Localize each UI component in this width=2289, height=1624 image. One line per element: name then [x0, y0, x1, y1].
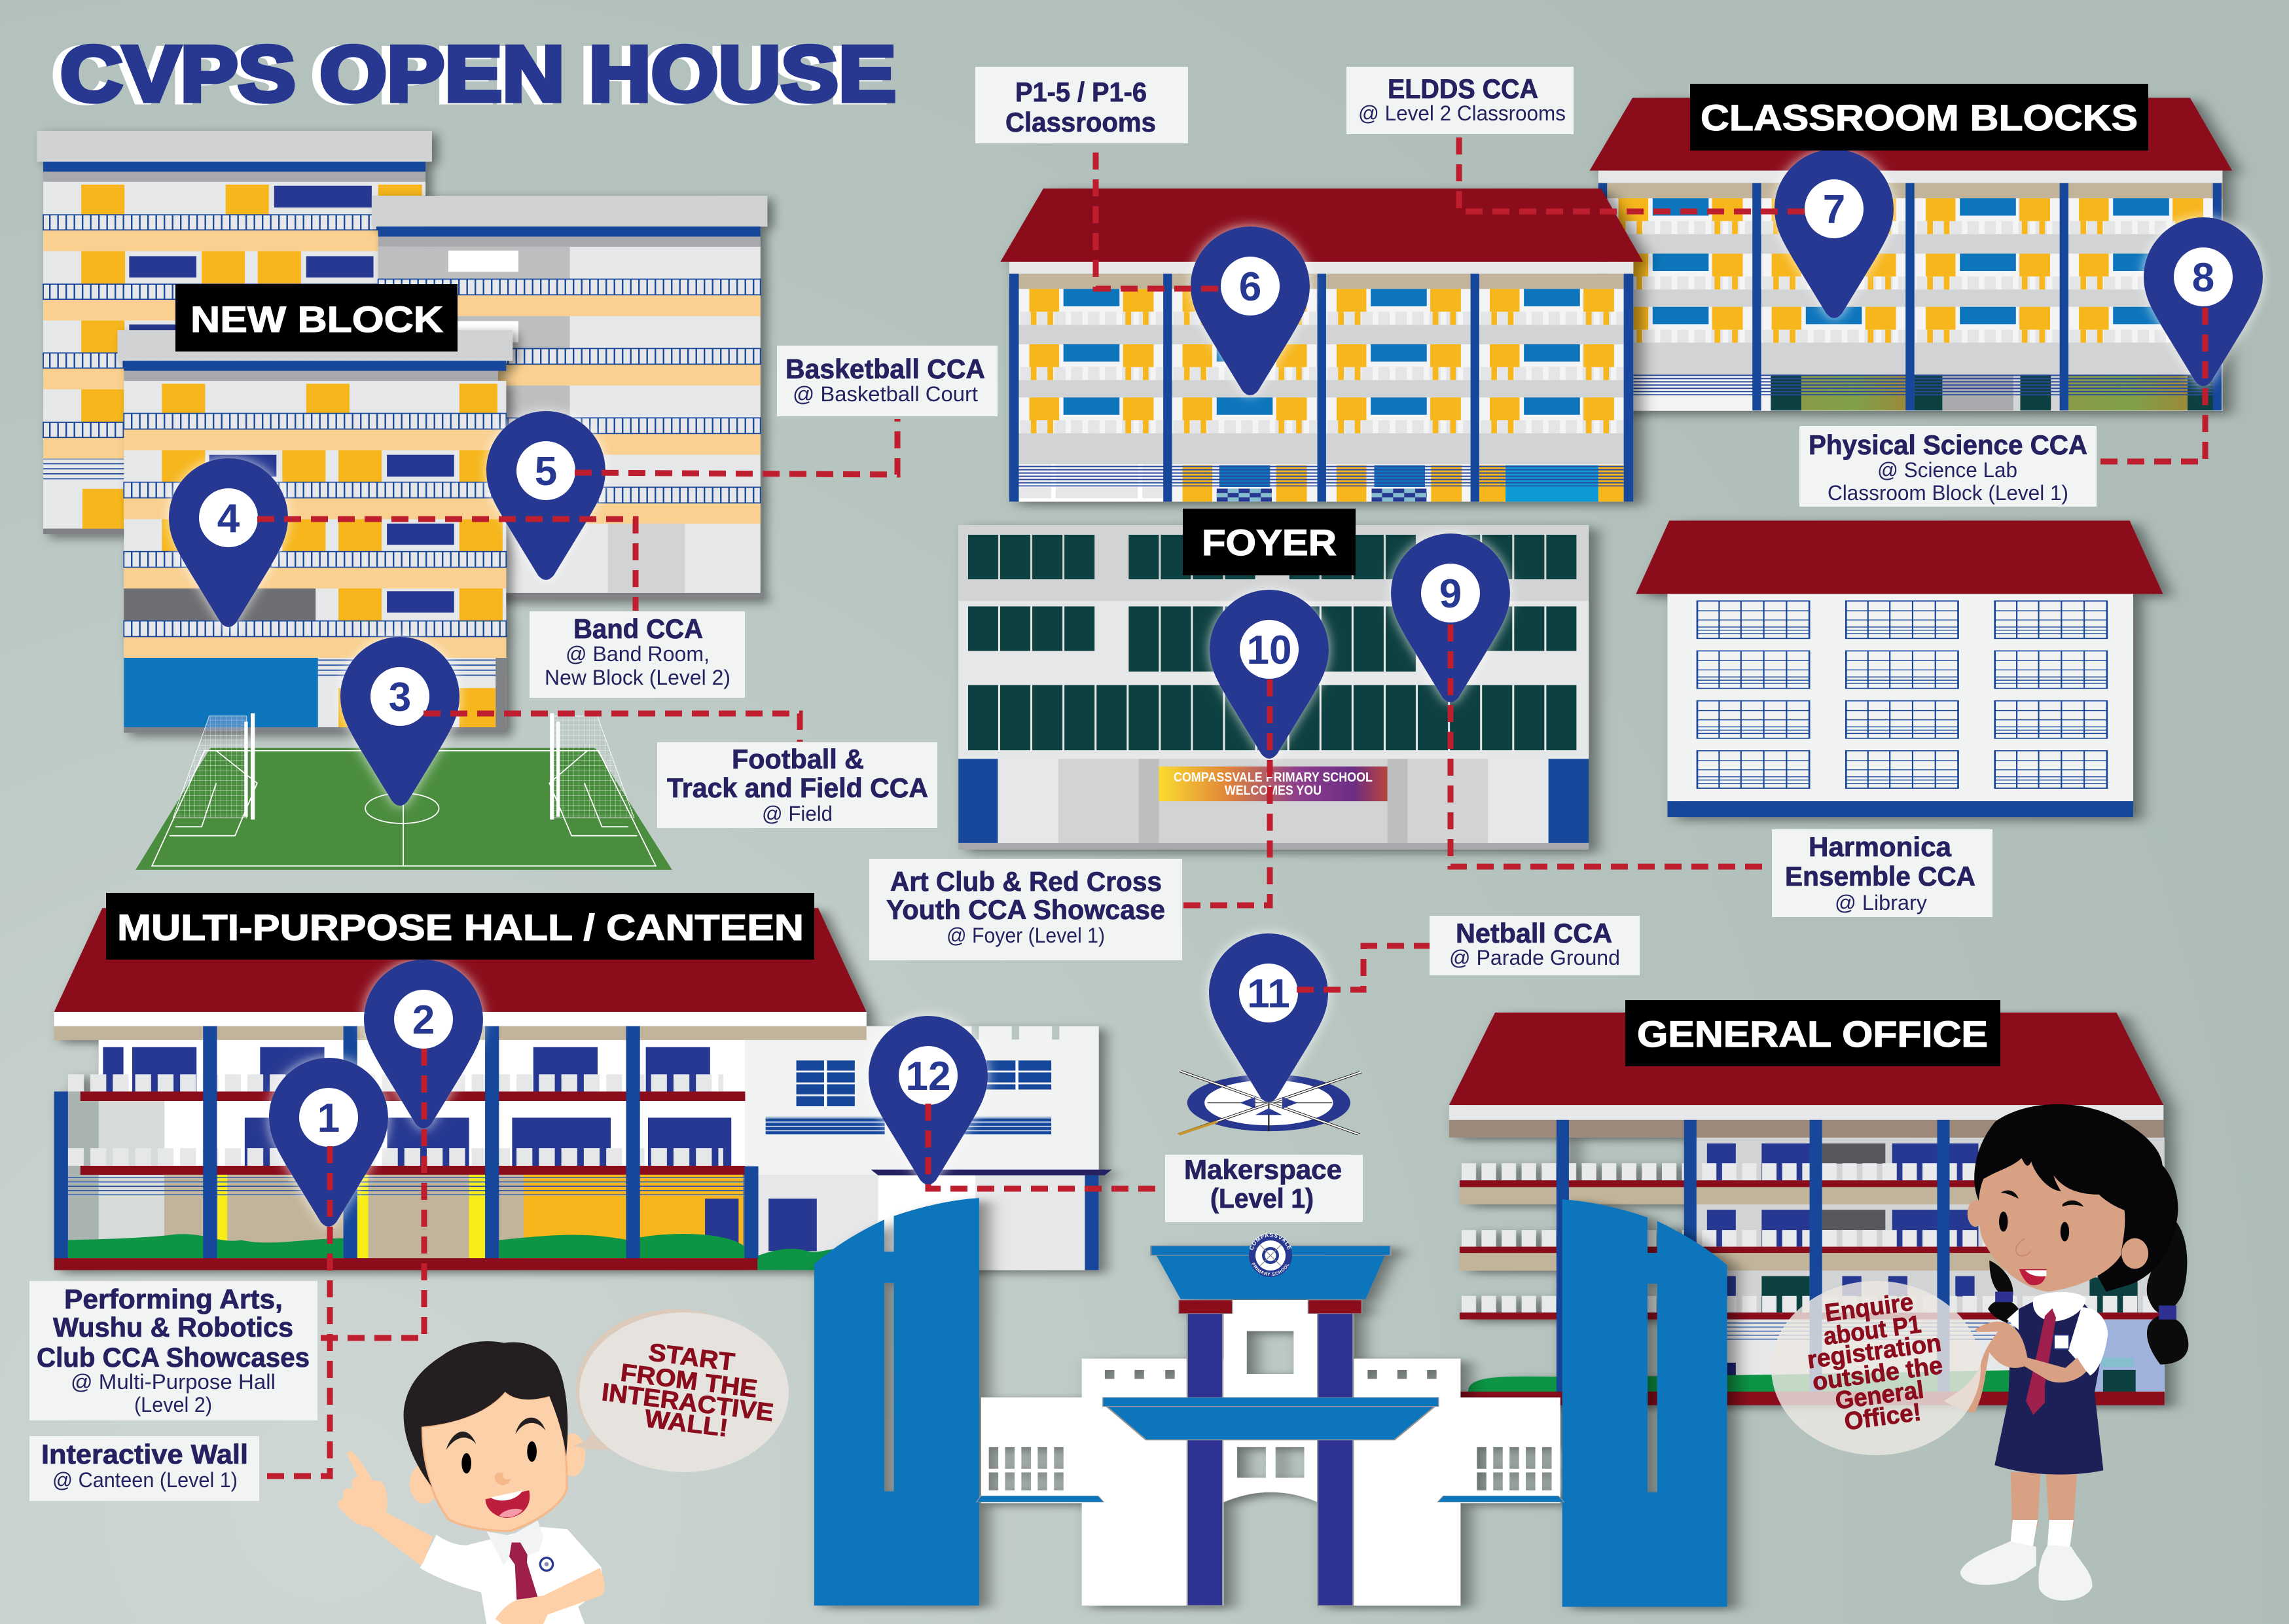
label: ELDDS CCA: ELDDS CCA: [1388, 73, 1538, 104]
new block rear left wing: [37, 131, 432, 534]
label: Basketball CCA: [777, 346, 998, 416]
gate logo: COMPASSVALE: [1250, 1233, 1292, 1250]
connector: pin 10 to Art Club: [1182, 679, 1270, 905]
pin 11: 11: [1247, 971, 1290, 1017]
gate logo: PRIMARY SCHOOL: [1252, 1262, 1289, 1276]
heading: Foyer: FOYER: [1202, 522, 1337, 563]
label: Art Club and Red Cross: Art Club & Red Cross: [890, 866, 1162, 897]
label: ELDDS CCA: [1346, 67, 1574, 134]
girl speech bubble: about P1: [1822, 1310, 1923, 1351]
boy eyes: [461, 1441, 537, 1473]
boy pointing arm: [338, 1451, 433, 1566]
label: Makerspace: Makerspace: [1184, 1154, 1342, 1185]
pin 11: [1209, 933, 1328, 1102]
label: Harmonica Ensemble CCA: [1772, 829, 1992, 917]
label: Netball CCA: Netball CCA: [1456, 918, 1612, 948]
pin 12: [869, 1016, 988, 1185]
classroom block front: [1000, 189, 1643, 501]
connector: pin 1 to Interactive Wall: [260, 1146, 330, 1476]
girl face: [1978, 1158, 2125, 1291]
pin 1: 1: [317, 1096, 340, 1141]
girl ear: [1968, 1200, 2148, 1269]
connector: pin 9 to Harmonica: [1451, 624, 1773, 867]
label: P1-5 / P1-6 Classrooms: [975, 67, 1188, 143]
girl pinafore: [1994, 1299, 2106, 1475]
label: Band CCA: Band CCA: [573, 613, 703, 644]
pin 4: [169, 458, 288, 627]
banner text: COMPASSVALE PRIMARY SCHOOL: [1174, 770, 1373, 785]
title: CVPS OPEN HOUSE: [60, 30, 896, 118]
heading: Classroom Blocks: [1690, 84, 2148, 151]
label: Physical Science CCA: Classroom Block (Level 1): [1828, 481, 2068, 505]
pin 12: 12: [906, 1054, 950, 1099]
boy collar: [486, 1521, 543, 1566]
girl mouth: [2019, 1269, 2046, 1285]
banner text: [1174, 770, 1373, 798]
boy hair: [404, 1341, 568, 1487]
parade ground emblem: [1179, 1071, 1361, 1134]
connector: pin 12 to Makerspace: [928, 1104, 1165, 1189]
heading: General Office: [1625, 1000, 2000, 1066]
label: Harmonica Ensemble CCA: Ensemble CCA: [1785, 861, 1975, 892]
heading: New Block: NEW BLOCK: [190, 298, 443, 340]
boy tie: [509, 1542, 537, 1600]
label: Basketball CCA: @ Basketball Court: [793, 382, 978, 406]
connector: pin 11 to Netball: [1297, 946, 1430, 990]
boy nose: [495, 1473, 511, 1485]
boy ears: [410, 1434, 585, 1504]
gate left tower: [814, 1198, 979, 1606]
boy eyebrows: [446, 1418, 545, 1450]
heading: Multi-Purpose Hall / Canteen: [106, 893, 814, 960]
connector: pin 4 to Band: [257, 519, 636, 611]
school gate main building: [814, 1198, 1727, 1607]
label: Performing Arts: @ Multi-Purpose Hall: [71, 1370, 276, 1394]
girl badge: [2054, 1335, 2069, 1349]
heading: General Office: GENERAL OFFICE: [1637, 1013, 1988, 1055]
general office building: [1449, 1013, 2165, 1405]
label: Basketball CCA: Basketball CCA: [785, 353, 985, 384]
boy shirt: [420, 1527, 604, 1624]
pin 8: [2144, 217, 2263, 386]
label: Interactive Wall: Interactive Wall: [41, 1439, 248, 1470]
boy speech bubble: WALL!: [643, 1405, 730, 1443]
girl hair: [1974, 1104, 2178, 1291]
football field: [135, 713, 672, 870]
label: Football and Track and Field CCA: [657, 742, 937, 828]
connector: pin 3 to Football: [424, 713, 800, 742]
pin 9: 9: [1439, 571, 1462, 617]
connector: pin 7 to ELDDS: [1459, 134, 1805, 211]
label: Netball CCA: @ Parade Ground: [1449, 946, 1620, 969]
foyer welcome banner: [1159, 767, 1388, 801]
pin 5: 5: [535, 449, 557, 494]
girl speech bubble: [1771, 1281, 1981, 1455]
label: Physical Science CCA: Physical Science CCA: [1809, 429, 2087, 460]
connector: pin 8 to Physical Science: [2098, 308, 2205, 461]
title: CVPS OPEN HOUSE: [52, 31, 888, 119]
label: Performing Arts: Performing Arts,: [64, 1284, 283, 1314]
label: Performing Arts: [29, 1281, 317, 1420]
label: Art Club and Red Cross: @ Foyer (Level 1): [946, 924, 1105, 947]
girl collar: [2033, 1292, 2086, 1322]
label: ELDDS CCA: @ Level 2 Classrooms: [1358, 101, 1566, 125]
label: Harmonica Ensemble CCA: @ Library: [1835, 891, 1927, 914]
heading: Foyer: [1183, 509, 1356, 575]
pin 3: [340, 637, 460, 806]
label: Physical Science CCA: [1799, 426, 2097, 507]
building group: classroom blocks, foyer, library: [958, 98, 2232, 850]
pin 5: [486, 411, 605, 580]
gate centre block: [977, 1246, 1564, 1606]
foyer building: [958, 525, 1589, 850]
girl braids: [1988, 1219, 2188, 1365]
pin 8: 8: [2192, 255, 2214, 300]
girl tie: [2026, 1308, 2056, 1415]
girl sleeves: [2007, 1307, 2108, 1376]
label: Football and Track and Field CCA: @ Field: [762, 802, 833, 825]
label: P1-5 / P1-6 Classrooms: P1-5 / P1-6: [1015, 77, 1147, 107]
pin 2: [364, 960, 483, 1128]
heading: Multi-Purpose Hall / Canteen: MULTI-PURPOSE HALL / CANTEEN: [117, 907, 804, 948]
boy mouth: [486, 1490, 530, 1518]
boy face: [421, 1392, 567, 1531]
boy speech bubble: [573, 1309, 789, 1472]
boy character: [338, 1341, 605, 1624]
building group: new block: [37, 131, 767, 870]
label: Band CCA: [530, 611, 745, 698]
label: Performing Arts: Club CCA Showcases: [37, 1342, 310, 1373]
pin 7: [1775, 149, 1894, 318]
pin 6: 6: [1239, 264, 1261, 310]
girl legs: [2011, 1472, 2077, 1528]
girl socks: [2010, 1520, 2074, 1549]
girl arms: [1944, 1322, 2086, 1413]
pin 7: 7: [1823, 187, 1845, 232]
pin 9: [1391, 533, 1510, 702]
library building: [1636, 520, 2163, 817]
girl speech bubble: outside the: [1811, 1352, 1944, 1396]
connector: pin 6 to P1-5: [1096, 143, 1218, 289]
gate right tower: [1562, 1199, 1727, 1607]
heading: Classroom Blocks: CLASSROOM BLOCKS: [1701, 97, 2138, 138]
label: Makerspace: [1165, 1154, 1363, 1222]
multi-purpose hall and canteen building: [54, 908, 1112, 1270]
girl speech bubble: General: [1833, 1376, 1926, 1415]
girl shoes: [1960, 1542, 2092, 1600]
pin 3: 3: [389, 675, 411, 720]
connector: pin 5 to Basketball: [575, 419, 897, 475]
label: P1-5 / P1-6 Classrooms: Classrooms: [1005, 107, 1156, 137]
classroom block rear: [1589, 98, 2232, 411]
girl nose: [2016, 1239, 2030, 1255]
girl speech bubble: Enquire: [1823, 1288, 1915, 1327]
label: Performing Arts: Wushu & Robotics: [53, 1312, 293, 1343]
new block rear right wing: [372, 196, 767, 599]
pin 1: [269, 1058, 388, 1227]
label: Harmonica Ensemble CCA: Harmonica: [1809, 831, 1952, 862]
girl character: [1944, 1104, 2188, 1600]
boy right arm: [496, 1568, 605, 1624]
girl eyebrows: [2000, 1190, 2083, 1206]
pin 2: 2: [412, 998, 435, 1043]
boy speech bubble: START: [647, 1339, 736, 1377]
girl speech bubble: registration: [1806, 1329, 1943, 1374]
girl eyes: [1999, 1212, 2069, 1241]
connector: pin 2 to Performing Arts: [317, 1049, 424, 1338]
label: Football and Track and Field CCA: Football &: [732, 744, 864, 774]
boy speech bubble: FROM THE: [619, 1359, 759, 1403]
label: Interactive Wall: [29, 1436, 259, 1501]
pin 4: 4: [217, 496, 240, 541]
heading: New Block: [175, 284, 458, 352]
label: Art Club and Red Cross: Youth CCA Showcase: [886, 894, 1165, 925]
pin 6: [1191, 226, 1310, 395]
pin 10: 10: [1247, 628, 1291, 673]
label: Makerspace: (Level 1): [1210, 1183, 1314, 1214]
label: Football and Track and Field CCA: Track and Field CCA: [667, 772, 928, 803]
label: Physical Science CCA: @ Science Lab: [1877, 458, 2017, 482]
new block front wing: [117, 330, 513, 733]
label: Band CCA: New Block (Level 2): [545, 666, 730, 689]
label: Band CCA: @ Band Room,: [566, 642, 710, 666]
girl speech bubble: Office!: [1843, 1399, 1923, 1436]
banner text: WELCOMES YOU: [1225, 784, 1322, 798]
label: Performing Arts: (Level 2): [134, 1393, 212, 1416]
gate logo: [1249, 1233, 1292, 1277]
boy badge: [539, 1557, 554, 1572]
boy speech bubble: INTERACTIVE: [600, 1379, 775, 1427]
pin 10: [1210, 590, 1329, 759]
label: Art Club and Red Cross: [869, 859, 1182, 960]
label: Interactive Wall: @ Canteen (Level 1): [52, 1468, 238, 1492]
label: Netball CCA: [1430, 916, 1640, 975]
